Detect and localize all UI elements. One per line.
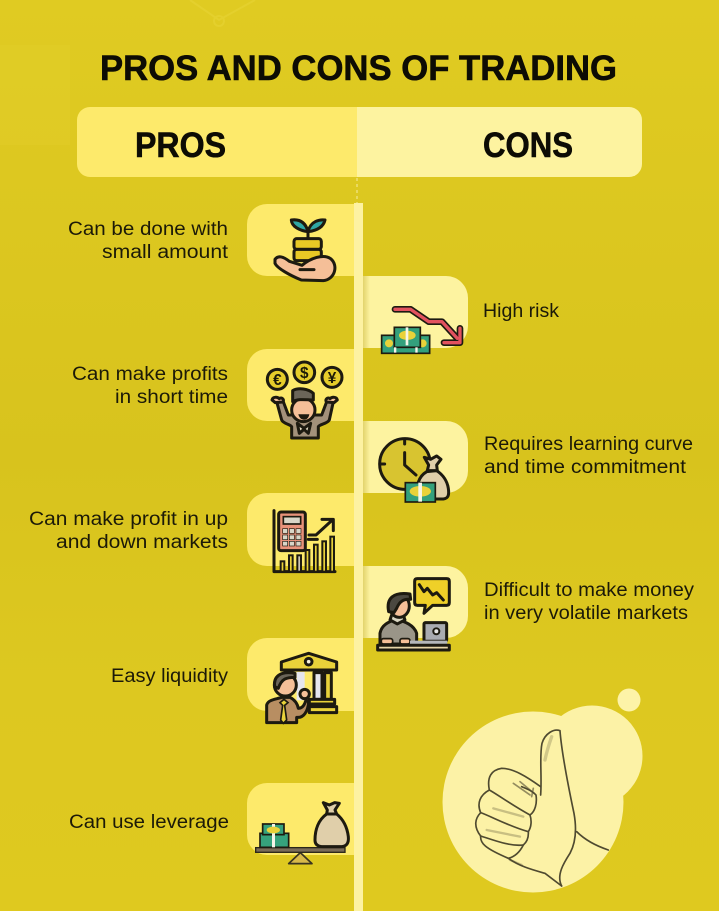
label: Can be done with	[68, 219, 228, 240]
icon: falling arrow and money	[382, 309, 460, 353]
icon: happy person with currency coins: $	[300, 365, 309, 382]
background faint chart pattern	[0, 0, 255, 145]
icon: calculator and rising bars	[274, 511, 335, 572]
con row 3	[363, 566, 695, 650]
icon: balance with money and bag	[256, 803, 348, 864]
cons heading: CONS	[483, 126, 573, 165]
small circle	[618, 688, 640, 712]
pro row 1	[68, 204, 354, 281]
label: small amount	[102, 242, 229, 263]
title: PROS AND CONS OF TRADING	[100, 49, 617, 88]
label: Can make profit in up	[29, 509, 228, 530]
card	[247, 493, 354, 566]
pro row 4	[111, 638, 354, 723]
card shadow	[363, 566, 370, 638]
header bar	[77, 107, 642, 177]
card	[363, 421, 468, 493]
label: and down markets	[56, 532, 228, 553]
label: Can make profits	[72, 364, 228, 385]
pro row 5	[69, 783, 354, 864]
icon: happy person with currency coins: ¥	[328, 370, 337, 387]
icon: clock, money bag and banknote	[380, 439, 449, 502]
icon: happy person with currency coins: €	[273, 372, 282, 389]
pro row 2	[72, 349, 354, 438]
pros header cell	[77, 107, 357, 177]
card shadow	[363, 421, 370, 493]
label: Difficult to make money	[484, 580, 695, 601]
icon: person in front of bank	[267, 653, 337, 723]
decorative bubble with thumbs-up	[442, 688, 642, 892]
card	[247, 349, 354, 421]
icon: happy person with currency coins	[267, 362, 342, 438]
card	[247, 638, 354, 711]
label: Easy liquidity	[111, 666, 229, 687]
pros heading: PROS	[135, 126, 226, 165]
cons header cell	[357, 107, 642, 177]
pro row 3	[29, 493, 354, 572]
label: in short time	[115, 387, 228, 408]
label: Requires learning curve	[484, 434, 693, 455]
label: in very volatile markets	[484, 603, 688, 624]
bubble shape	[442, 706, 642, 892]
card	[363, 276, 468, 348]
icon: trader at laptop with falling chart bubble	[378, 579, 449, 650]
card	[363, 566, 468, 638]
card shadow	[363, 276, 370, 348]
con row 1	[363, 276, 560, 353]
center vertical timeline bar	[354, 203, 363, 911]
center dashed connector	[356, 178, 358, 203]
con row 2	[363, 421, 693, 502]
card	[247, 204, 354, 276]
icon: plant on coins in hand	[275, 220, 335, 281]
label: and time commitment	[484, 457, 687, 478]
label: High risk	[483, 301, 560, 322]
label: Can use leverage	[69, 812, 229, 833]
icon: hand drawing thumbs up	[476, 730, 608, 886]
card	[247, 783, 354, 855]
